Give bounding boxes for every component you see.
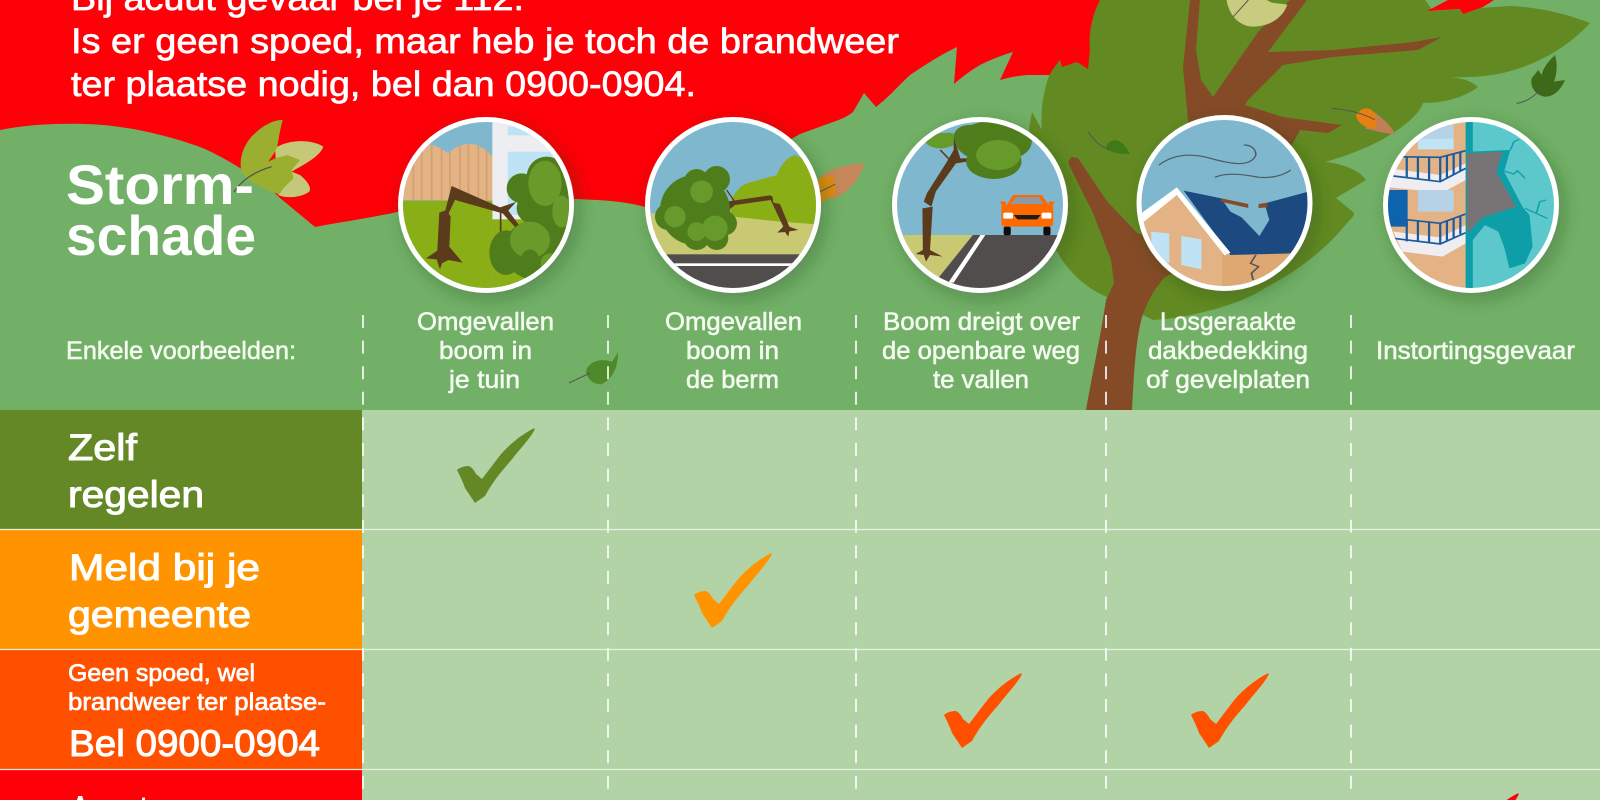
row label: zelf regelen: regelen	[68, 474, 204, 515]
title	[66, 153, 256, 267]
row label: bel 0900-0904: Geen spoed, wel	[68, 660, 255, 687]
column label 1: Omgevallen	[417, 308, 554, 336]
circle 5: collapse danger	[1383, 113, 1568, 300]
row label: bel 0900-0904: Bel 0900-0904	[69, 723, 320, 764]
row label: meld bij je gemeente: Meld bij je	[69, 547, 260, 588]
row label: bel 0900-0904	[0, 650, 362, 770]
leaf: beside title	[234, 120, 323, 197]
intro label: Enkele voorbeelden:	[66, 337, 296, 365]
column label 1: je tuin	[448, 366, 520, 394]
column label 2: boom in	[686, 337, 779, 365]
leaf: pale top leaf	[1227, 0, 1287, 27]
column label 2	[665, 308, 802, 394]
column label 1	[417, 308, 554, 394]
leaf: lower column one	[569, 352, 618, 384]
tree	[1029, 0, 1590, 410]
column label 4: dakbedekking	[1148, 337, 1308, 365]
red storm sky	[0, 0, 1100, 227]
circle 2: fallen tree at roadside	[640, 113, 827, 300]
check: gemeente, column 2	[694, 553, 772, 628]
column label 2: Omgevallen	[665, 308, 802, 336]
column label 4: Losgeraakte	[1160, 308, 1296, 336]
leaf: orange autumn	[1332, 108, 1395, 134]
background: green field	[0, 0, 1600, 410]
leaf: small green	[1088, 132, 1130, 154]
column label 4	[1146, 308, 1310, 394]
check: brandweer, column 3	[944, 673, 1022, 748]
circle 4: damaged roof	[1130, 110, 1317, 297]
leaf: dark green	[1517, 55, 1565, 103]
row label: zelf regelen: Zelf	[68, 427, 138, 468]
column label 5: Instortingsgevaar	[1376, 337, 1575, 365]
row label: acuut gevaar	[0, 770, 362, 800]
check: zelf regelen, column 1	[457, 428, 534, 503]
leaf: brown orange by circle	[810, 163, 864, 203]
circle 3: tree threatening road	[889, 113, 1076, 300]
falling leaves	[234, 0, 1565, 384]
alert text top: ter plaatse nodig, bel dan 0900-0904.	[71, 64, 696, 104]
column label 4: of gevelplaten	[1146, 366, 1310, 394]
column label 3: te vallen	[933, 366, 1029, 394]
title: Storm-	[66, 153, 254, 216]
tree trunk and branches	[1069, 0, 1442, 410]
check: acuut gevaar, column 5	[1441, 793, 1518, 800]
row label: bel 0900-0904: brandweer ter plaatse-	[68, 689, 326, 716]
circle 1: fallen tree in garden	[393, 113, 580, 300]
tree foliage	[1029, 0, 1590, 320]
row label: meld bij je gemeente: gemeente	[68, 594, 251, 635]
column label 1: boom in	[439, 337, 532, 365]
column label 3	[882, 308, 1080, 394]
top-right red sky patch	[1427, 0, 1494, 14]
table body	[362, 410, 1600, 800]
alert text top	[71, 0, 899, 104]
column label 3: Boom dreigt over	[883, 308, 1080, 336]
row label: zelf regelen	[0, 410, 362, 530]
row label: meld bij je gemeente	[0, 530, 362, 650]
alert text top: Is er geen spoed, maar heb je toch de brandweer	[71, 21, 899, 61]
title: schade	[66, 204, 256, 267]
column label 3: de openbare weg	[882, 337, 1080, 365]
column label 2: de berm	[686, 366, 779, 394]
check: brandweer, column 4	[1191, 673, 1268, 748]
